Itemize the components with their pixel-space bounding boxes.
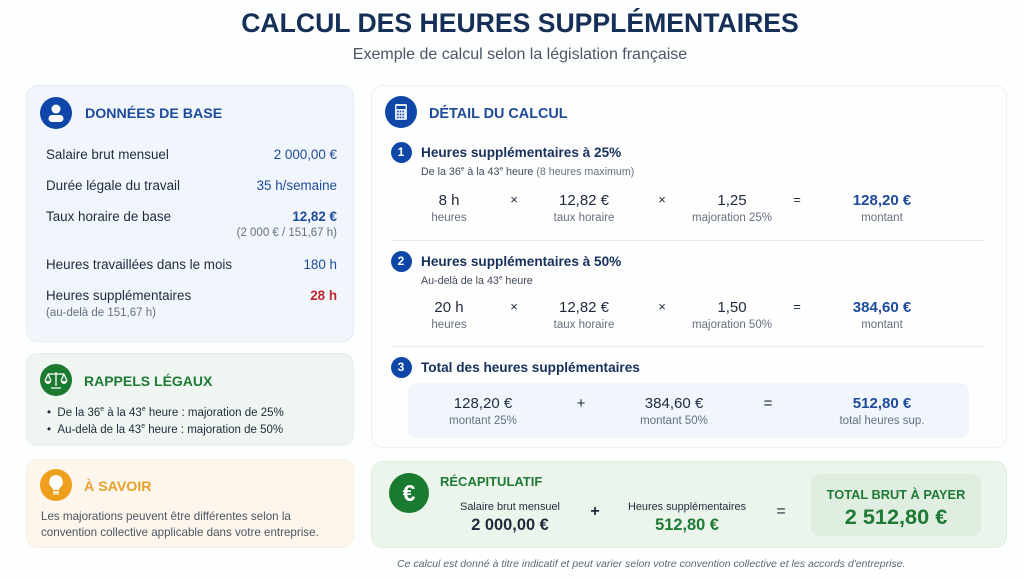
step 2 multiply: × bbox=[658, 299, 666, 314]
total amount: 512,80 € bbox=[853, 394, 911, 412]
step 1 multiply: × bbox=[510, 192, 518, 207]
caption 50%: montant 50% bbox=[640, 415, 708, 427]
step 2 majoration: 1,50 bbox=[717, 298, 747, 316]
step 1 majoration: 1,25 bbox=[717, 192, 747, 208]
step 1 rate: 12,82 € bbox=[559, 192, 609, 208]
icon: user bbox=[40, 97, 72, 129]
note text: convention collective applicable dans votre entreprise. bbox=[41, 526, 319, 539]
footnote: Ce calcul est donné à titre indicatif et peut varier selon votre convention collective et les accords d'entreprise. bbox=[397, 558, 906, 570]
note: taux: (2 000 € / 151,67 h) bbox=[237, 227, 337, 239]
icon: euro bbox=[389, 473, 429, 513]
panel: détail du calcul bbox=[371, 85, 1007, 448]
step 1 result: 128,20 € bbox=[853, 192, 911, 208]
step 1 rate caption: taux horaire bbox=[554, 212, 614, 224]
step 2 majoration caption: majoration 50% bbox=[692, 319, 772, 331]
step 1 subtitle: De la 36e à la 43e heure (8 heures maximum) bbox=[421, 165, 634, 178]
amount 50%: 384,60 € bbox=[645, 394, 703, 412]
caption 25%: montant 25% bbox=[449, 415, 517, 427]
step 2 title: Heures supplémentaires à 50% bbox=[421, 254, 621, 269]
row: heures travaillées: Heures travaillées dans le mois bbox=[46, 256, 232, 272]
label salaire: Salaire brut mensuel bbox=[460, 500, 560, 512]
icon: bulb bbox=[40, 469, 72, 501]
step 2 rate: 12,82 € bbox=[559, 298, 609, 316]
value: salaire: 2 000,00 € bbox=[274, 146, 337, 162]
step 2 equals: = bbox=[793, 299, 801, 314]
equals: = bbox=[764, 394, 772, 412]
icon: calculator bbox=[385, 96, 417, 128]
step 2 result caption: montant bbox=[861, 319, 903, 331]
step 1 badge bbox=[390, 142, 412, 162]
legal list: • De la 36e à la 43e heure : majoration de 25% bbox=[47, 406, 284, 418]
equals: = bbox=[776, 503, 786, 520]
value heures sup: 512,80 € bbox=[655, 516, 719, 534]
subtitle: Exemple de calcul selon la législation française bbox=[353, 46, 687, 63]
heading: RAPPELS LÉGAUX bbox=[84, 373, 212, 389]
heading: DONNÉES DE BASE bbox=[85, 106, 222, 122]
panel: à savoir bbox=[26, 459, 354, 548]
legal list: • Au-delà de la 43e heure : majoration de 50% bbox=[47, 423, 283, 436]
legal list bbox=[47, 406, 284, 436]
step 2 hours caption: heures bbox=[431, 319, 467, 331]
heading: RÉCAPITULATIF bbox=[440, 474, 542, 489]
value: taux: 12,82 € bbox=[292, 208, 337, 224]
plus: + bbox=[590, 503, 600, 520]
step 1 majoration caption: majoration 25% bbox=[692, 212, 772, 224]
value salaire: 2 000,00 € bbox=[471, 516, 549, 534]
step 2 rate caption: taux horaire bbox=[554, 319, 614, 331]
step 3 badge bbox=[390, 356, 412, 378]
panel: rappels légaux bbox=[26, 353, 354, 446]
step 3 badge: 3 bbox=[398, 360, 404, 374]
step 1 hours: 8 h bbox=[439, 192, 459, 208]
step 1 multiply: × bbox=[658, 192, 666, 207]
heading: À SAVOIR bbox=[84, 479, 152, 495]
step 1 title: Heures supplémentaires à 25% bbox=[421, 145, 621, 160]
row: heures supplémentaires: Heures supplémentaires bbox=[46, 288, 191, 302]
total box bbox=[811, 474, 981, 536]
panel: récapitulatif bbox=[371, 461, 1007, 548]
amount 25%: 128,20 € bbox=[454, 394, 512, 412]
total label: TOTAL BRUT À PAYER bbox=[827, 486, 965, 502]
step 1 hours caption: heures bbox=[431, 212, 467, 224]
step 2 hours: 20 h bbox=[434, 298, 464, 316]
value: heures supplémentaires: 28 h bbox=[310, 288, 337, 302]
row: durée: Durée légale du travail bbox=[46, 178, 180, 192]
value: durée: 35 h/semaine bbox=[257, 178, 337, 192]
total box bbox=[408, 383, 969, 438]
row: taux: Taux horaire de base bbox=[46, 208, 171, 224]
heading: DÉTAIL DU CALCUL bbox=[429, 106, 568, 122]
panel: données de base bbox=[26, 85, 354, 342]
label heures sup: Heures supplémentaires bbox=[628, 500, 746, 512]
icon: euro: € bbox=[403, 480, 416, 506]
row: salaire: Salaire brut mensuel bbox=[46, 146, 169, 162]
note: heures supplémentaires: (au-delà de 151,67 h) bbox=[46, 306, 156, 318]
step 2 badge: 2 bbox=[398, 254, 404, 268]
plus: + bbox=[577, 394, 585, 412]
icon: balance bbox=[40, 364, 72, 396]
step 2 subtitle: Au-delà de la 43e heure bbox=[421, 274, 533, 286]
title: CALCUL DES HEURES SUPPLÉMENTAIRES bbox=[241, 8, 799, 38]
step 2 multiply: × bbox=[510, 299, 518, 314]
step 2 result: 384,60 € bbox=[853, 298, 911, 316]
total value: 2 512,80 € bbox=[845, 504, 947, 529]
step 2 badge bbox=[390, 250, 412, 272]
step 1 badge: 1 bbox=[398, 144, 404, 158]
total caption: total heures sup. bbox=[839, 415, 925, 427]
note text bbox=[41, 510, 319, 539]
value: heures travaillées: 180 h bbox=[303, 256, 337, 272]
step 1 result caption: montant bbox=[861, 212, 903, 224]
step 3 title: Total des heures supplémentaires bbox=[421, 360, 640, 374]
step 1 equals: = bbox=[793, 192, 801, 207]
note text: Les majorations peuvent être différentes selon la bbox=[41, 510, 291, 522]
